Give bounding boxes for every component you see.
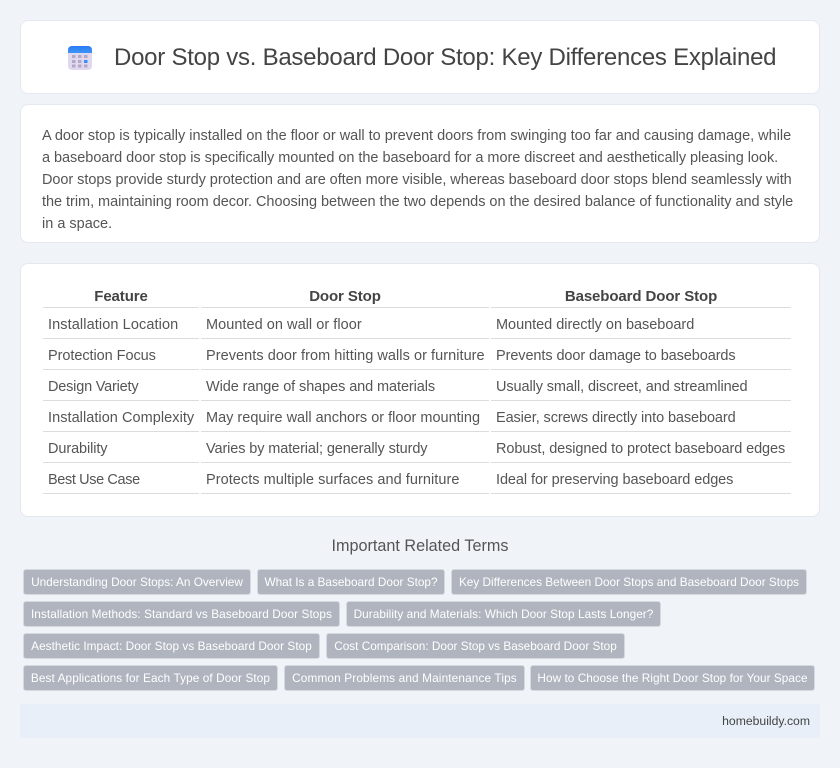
intro text bbox=[42, 128, 793, 232]
header card bbox=[20, 20, 820, 94]
panel: intro bbox=[20, 104, 820, 243]
row: durability: Durability bbox=[48, 441, 107, 457]
text: Usually small, discreet, and streamlined bbox=[496, 379, 747, 395]
text: Mounted directly on baseboard bbox=[496, 317, 694, 333]
row: installation complexity: Installation Complexity bbox=[48, 410, 194, 426]
text: Ideal for preserving baseboard edges bbox=[496, 472, 733, 488]
table header: feature: Feature bbox=[94, 288, 148, 305]
row: design variety: Design Variety bbox=[48, 379, 138, 395]
row: protection focus: Protection Focus bbox=[48, 348, 156, 364]
text: Mounted on wall or floor bbox=[206, 317, 362, 333]
text: Varies by material; generally sturdy bbox=[206, 441, 427, 457]
related terms heading: Important Related Terms bbox=[332, 537, 508, 555]
text: Protects multiple surfaces and furniture bbox=[206, 472, 459, 488]
tag: Durability and Materials: Which Door Stop Lasts Longer? bbox=[354, 607, 653, 621]
footer bar bbox=[20, 704, 820, 738]
icon: calendar bbox=[68, 46, 92, 70]
tag bbox=[451, 569, 807, 595]
tag: How to Choose the Right Door Stop for Your Space bbox=[537, 671, 808, 685]
panel: comparison table bbox=[20, 263, 820, 517]
text: Prevents door damage to baseboards bbox=[496, 348, 736, 364]
intro text: A door stop is typically installed on the floor or wall to prevent doors from swinging too far and causing damage, while bbox=[42, 128, 791, 144]
text: Easier, screws directly into baseboard bbox=[496, 410, 736, 426]
tag: Common Problems and Maintenance Tips bbox=[292, 671, 517, 685]
tag: Understanding Door Stops: An Overview bbox=[31, 575, 243, 589]
text: Robust, designed to protect baseboard edges bbox=[496, 441, 785, 457]
tag bbox=[346, 601, 661, 627]
tag bbox=[326, 633, 625, 659]
text: May require wall anchors or floor mounting bbox=[206, 410, 480, 426]
table header: baseboard door stop: Baseboard Door Stop bbox=[565, 288, 717, 305]
title: Door Stop vs. Baseboard Door Stop: Key Differences Explained bbox=[114, 44, 776, 71]
table header: door stop: Door Stop bbox=[309, 288, 381, 305]
intro text: Door stops provide sturdy protection and are often more visible, whereas baseboard door stops blend seamlessly with bbox=[42, 172, 792, 188]
tag: Aesthetic Impact: Door Stop vs Baseboard Door Stop bbox=[31, 639, 312, 653]
tag bbox=[23, 601, 340, 627]
intro text: in a space. bbox=[42, 216, 112, 232]
row: best use case: Best Use Case bbox=[48, 472, 140, 488]
intro text: a baseboard door stop is specifically mounted on the baseboard for a more discreet and aesthetically pleasing look. bbox=[42, 150, 778, 166]
tag: Installation Methods: Standard vs Baseboard Door Stops bbox=[31, 607, 332, 621]
text: Prevents door from hitting walls or furniture bbox=[206, 348, 485, 364]
tag bbox=[23, 569, 251, 595]
intro text: the trim, maintaining room decor. Choosing between the two depends on the desired balance of functionality and style bbox=[42, 194, 793, 210]
tag bbox=[530, 665, 815, 691]
tag: What Is a Baseboard Door Stop? bbox=[264, 575, 438, 589]
row: installation location: Installation Location bbox=[48, 317, 178, 333]
tag bbox=[23, 665, 278, 691]
tag: Best Applications for Each Type of Door Stop bbox=[31, 671, 270, 685]
tag bbox=[23, 633, 320, 659]
tag bbox=[257, 569, 445, 595]
footer text: homebuildy.com bbox=[722, 714, 810, 728]
text: Wide range of shapes and materials bbox=[206, 379, 435, 395]
tag: Cost Comparison: Door Stop vs Baseboard Door Stop bbox=[334, 639, 617, 653]
tag: Key Differences Between Door Stops and Baseboard Door Stops bbox=[459, 575, 799, 589]
tag bbox=[284, 665, 525, 691]
